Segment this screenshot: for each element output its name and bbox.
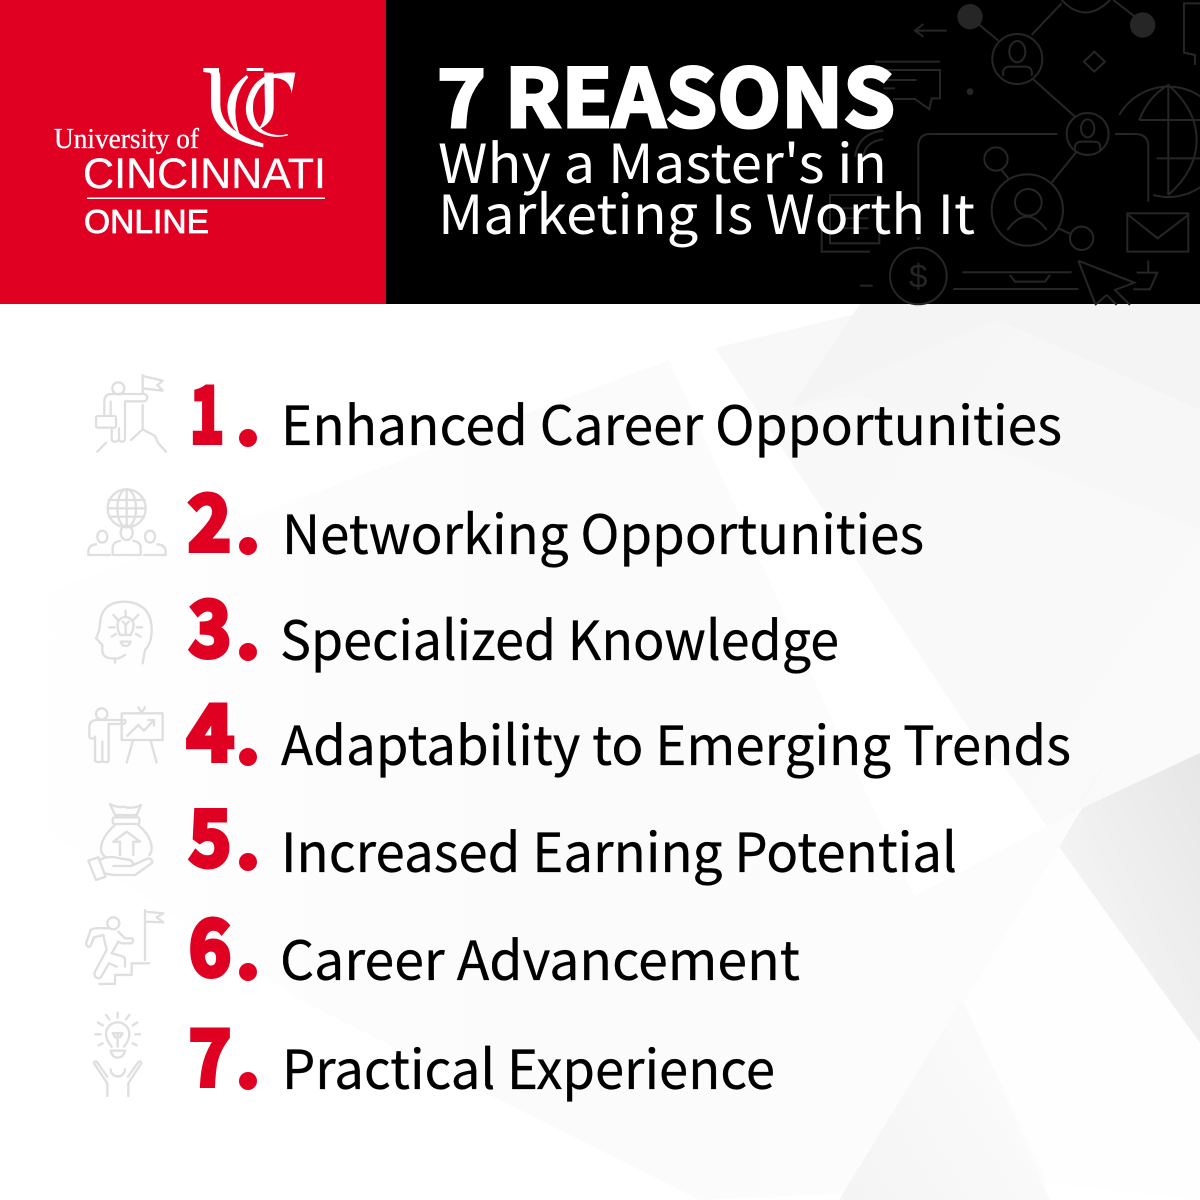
number 5: . [241, 833, 251, 877]
reason 1 row [96, 354, 1062, 466]
panel: red logo block [0, 0, 386, 304]
header line-art icons: $ [909, 258, 928, 295]
text: Specialized Knowledge: Specialized Knowledge [280, 597, 839, 676]
text: Networking Opportunities: Networking Opportunities [282, 491, 924, 570]
text: Career Advancement: Career Advancement [280, 917, 800, 996]
icon: globe and people [88, 489, 166, 555]
background: faceted grey polygons [0, 304, 1200, 1200]
number 6 [189, 888, 257, 998]
number 3: 3 [189, 568, 231, 680]
reason 5 row [88, 778, 957, 889]
number 4: . [241, 728, 251, 772]
logo: University of: University of [54, 123, 199, 155]
number 4 [187, 672, 257, 784]
icon: money bag on hand [88, 804, 152, 880]
reason 3 row [96, 568, 839, 680]
number 3 [189, 568, 257, 680]
number 5: 5 [189, 778, 231, 889]
header line-art icons [822, 0, 1200, 305]
text: Practical Experience: Practical Experience [282, 1026, 775, 1105]
reason 4 row [89, 672, 1071, 784]
icon: person under light bulb [94, 1013, 141, 1096]
title [437, 35, 975, 250]
text: Adaptability to Emerging Trends: Adaptability to Emerging Trends [281, 702, 1071, 781]
number 3: . [241, 624, 251, 668]
title: Marketing Is Worth It [438, 171, 975, 250]
number 2: 2 [188, 462, 231, 574]
text: Enhanced Career Opportunities: Enhanced Career Opportunities [281, 382, 1062, 461]
number 1: 1 [190, 354, 224, 466]
logo: ONLINE: ONLINE [84, 203, 209, 240]
number 6: . [241, 943, 251, 987]
icon: person with flag on summit [96, 375, 166, 452]
reason 2 row [88, 462, 924, 574]
logo: CINCINNATI: CINCINNATI [83, 150, 326, 198]
number 2: . [241, 517, 251, 561]
number 7: . [241, 1052, 251, 1096]
icon: presenter with chart [89, 707, 163, 763]
reason 6 row [86, 888, 800, 998]
number 7 [189, 998, 257, 1108]
title: 7 REASONS [437, 35, 895, 151]
reason 7 row [94, 998, 775, 1108]
panel: black header [386, 0, 1200, 305]
number 1: . [241, 409, 251, 453]
number 5 [189, 778, 257, 889]
number 7: 7 [189, 998, 231, 1108]
number 2 [188, 462, 257, 574]
icon: head with light bulb [96, 602, 152, 663]
logo: UC monogram [203, 68, 295, 147]
icon: person climbing stairs to flag [86, 910, 163, 984]
number 6: 6 [189, 888, 231, 998]
title: Why a Master's in [438, 120, 887, 199]
number 1 [190, 354, 257, 466]
number 4: 4 [187, 672, 234, 784]
text: Increased Earning Potential: Increased Earning Potential [281, 809, 957, 888]
